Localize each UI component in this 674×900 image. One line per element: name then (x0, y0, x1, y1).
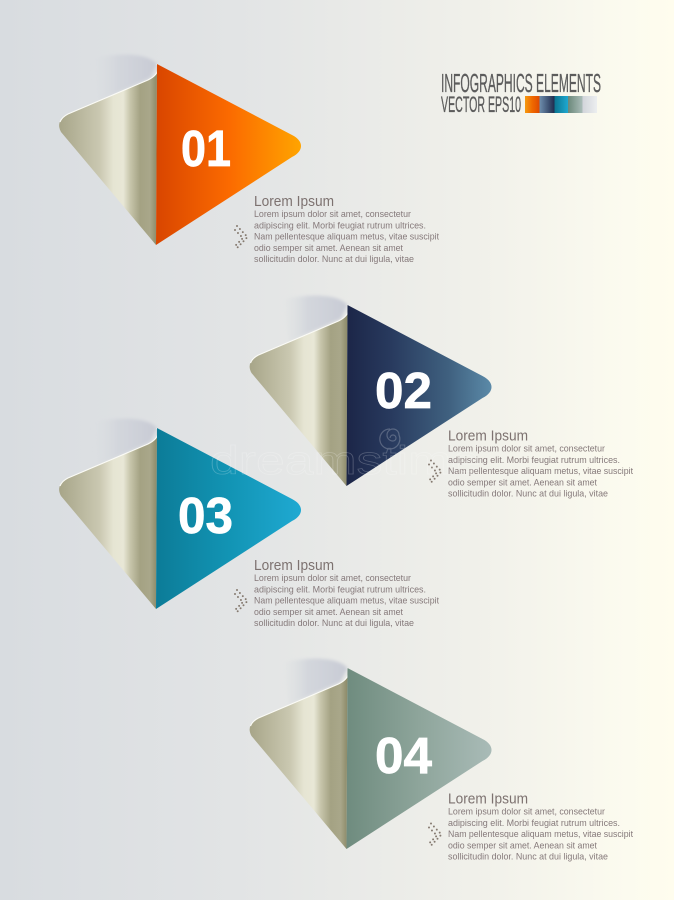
chevron icon (429, 460, 442, 482)
block body: Lorem ipsum dolor sit amet, consectetur (448, 442, 605, 454)
watermark word: dreamstime (210, 439, 480, 483)
block body: Lorem ipsum dolor sit amet, consectetur (254, 572, 411, 583)
block body: sollicitudin dolor. Nunc at dui ligula, vitae (448, 850, 608, 862)
block body: Nam pellentesque aliquam metus, vitae suscipit (448, 828, 633, 839)
panel: triangle 03 (59, 419, 301, 609)
navy triangle (346, 305, 492, 486)
text block 2 (429, 428, 633, 498)
heading: infographics elements (441, 68, 601, 117)
block title: Lorem Ipsum (448, 792, 528, 808)
chevron icon (235, 226, 248, 248)
block body: Lorem ipsum dolor sit amet, consectetur (254, 208, 411, 219)
block title: Lorem Ipsum (448, 428, 528, 444)
shadow behind curl (92, 55, 157, 101)
flap highlight edge (60, 428, 158, 486)
block body: odio semper sit amet. Aenean sit amet (448, 840, 597, 850)
block body (448, 442, 633, 498)
flap highlight edge (250, 305, 348, 363)
panel: triangle 02 (250, 296, 492, 486)
number 04: 04 (375, 727, 433, 784)
text block 3 (235, 558, 439, 628)
folded paper flap (250, 668, 348, 849)
panel: triangle 04 (250, 659, 492, 849)
orange triangle (156, 64, 301, 245)
block body: adipiscing elit. Morbi feugiat rutrum ultrices. (448, 817, 620, 828)
text block 1 (235, 194, 439, 264)
block body: Nam pellentesque aliquam metus, vitae suscipit (254, 230, 439, 242)
chevron icon (235, 590, 248, 612)
shadow behind curl (282, 296, 348, 342)
flap highlight edge (250, 668, 348, 726)
text block 4 (429, 792, 633, 862)
block body: adipiscing elit. Morbi feugiat rutrum ultrices. (448, 454, 620, 465)
chevron icon (429, 824, 442, 846)
block body (254, 572, 439, 628)
block body: sollicitudin dolor. Nunc at dui ligula, vitae (254, 617, 414, 628)
block body (254, 208, 439, 264)
watermark (210, 429, 480, 483)
block title: Lorem Ipsum (254, 558, 334, 574)
folded paper flap (59, 64, 158, 245)
block body: sollicitudin dolor. Nunc at dui ligula, vitae (448, 488, 608, 498)
block body: adipiscing elit. Morbi feugiat rutrum ultrices. (254, 220, 426, 230)
watermark spiral (380, 429, 400, 449)
block body: sollicitudin dolor. Nunc at dui ligula, vitae (254, 253, 414, 264)
folded paper flap (250, 305, 348, 486)
block body: odio semper sit amet. Aenean sit amet (254, 242, 403, 253)
teal triangle (156, 428, 301, 609)
block body: Lorem ipsum dolor sit amet, consectetur (448, 806, 605, 816)
block body: Nam pellentesque aliquam metus, vitae suscipit (448, 465, 633, 476)
block body: adipiscing elit. Morbi feugiat rutrum ultrices. (254, 584, 426, 594)
colour swatch strip (525, 96, 597, 113)
shadow behind curl (282, 659, 348, 705)
panel: triangle 01 (59, 55, 301, 245)
number 03: 03 (178, 487, 233, 544)
block body: Nam pellentesque aliquam metus, vitae suscipit (254, 594, 439, 606)
number 01: 01 (181, 120, 231, 177)
folded paper flap (59, 428, 158, 609)
heading: infographics elements: VECTOR EPS10 (441, 92, 521, 117)
sage triangle (346, 668, 492, 849)
block title: Lorem Ipsum (254, 194, 334, 210)
number 02: 02 (375, 362, 432, 419)
block body (448, 806, 633, 862)
flap highlight edge (60, 64, 158, 122)
block body: odio semper sit amet. Aenean sit amet (448, 476, 597, 488)
shadow behind curl (92, 419, 157, 465)
block body: odio semper sit amet. Aenean sit amet (254, 606, 403, 617)
